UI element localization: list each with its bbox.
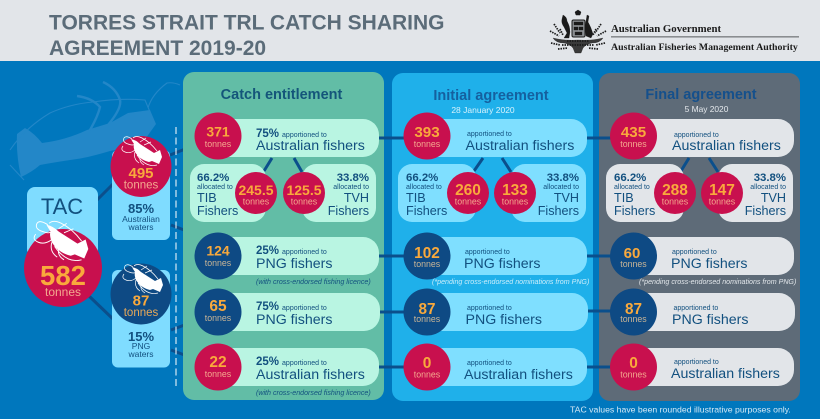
row: initial 102 PNG fishers: 102: [414, 245, 440, 262]
heading: [645, 87, 757, 114]
row: final 435 Australian fishers: [610, 112, 794, 160]
row: initial 102 PNG fishers: apportioned to: [465, 249, 510, 256]
row: final 435 Australian fishers: 435: [621, 124, 647, 141]
badge: 245.5 tonnes: [235, 172, 277, 214]
row: initial 393 Australian fishers: tonnes: [414, 139, 441, 149]
badge: 288 tonnes: 288: [662, 182, 688, 199]
sub-panel: catch TVH: [302, 164, 376, 222]
sub-panel: catch TIB: allocated to: [197, 184, 233, 191]
heading: Final agreement: [645, 87, 757, 103]
Australian waters share: 85%: [128, 201, 154, 216]
PNG waters share: [127, 329, 154, 359]
badge: 260 tonnes: 260: [455, 182, 481, 199]
row: final 60 PNG fishers: 60: [624, 245, 640, 262]
row: initial 87 PNG fishers: PNG fishers: [466, 312, 542, 328]
row: initial 102 PNG fishers: PNG fishers: [464, 256, 540, 272]
row: final 435 Australian fishers: apportioned to: [674, 132, 719, 139]
row: final 0 Australian fishers: [610, 344, 794, 390]
sub-panel: final TIB: allocated to: [614, 184, 650, 191]
badge: 495 tonnes: 495: [128, 165, 154, 182]
row: initial 393 Australian fishers: apportioned to: [467, 131, 512, 138]
icon: Australian coat of arms: [550, 10, 606, 53]
sub-panel: final TVH: allocated to: [750, 184, 786, 191]
connectors: TAC to waters: [89, 184, 113, 319]
row: catch 371 Australian fishers: tonnes: [205, 139, 232, 149]
panel: initial agreement: [392, 73, 593, 401]
row: catch 124 PNG fishers: (with cross-endorsed fishing licence): [256, 278, 371, 286]
row: final 87 PNG fishers: 87: [625, 301, 642, 318]
row: final 87 PNG fishers: [610, 288, 795, 336]
sub-panel: final TVH: 33.8%: [754, 172, 786, 184]
heading: Initial agreement: [433, 88, 549, 104]
sub-panel: catch TIB: 66.2%: [197, 172, 229, 184]
row: catch 124 PNG fishers: [194, 232, 379, 286]
panel: PNG waters: [112, 270, 170, 368]
PNG waters share: PNG: [132, 341, 150, 351]
badge: 87 tonnes: 87: [133, 292, 149, 310]
sub-panel: catch TIB: [190, 164, 266, 222]
PNG waters share: waters: [127, 349, 154, 359]
badge: 133 tonnes: 133: [502, 182, 528, 199]
row: final 0 Australian fishers: Australian fishers: [671, 366, 780, 382]
badge: 133 tonnes: [494, 172, 536, 214]
badge: 87 tonnes: [110, 264, 172, 324]
row: final 87 PNG fishers: tonnes: [620, 314, 647, 324]
sub-panel: initial TVH: 33.8%: [547, 172, 579, 184]
heading: Catch entitlement: [221, 87, 342, 103]
sub-panel: final TIB: TIB: [614, 191, 634, 205]
row: catch 371 Australian fishers: Australian fishers: [256, 138, 365, 154]
logo text: Australian Government / AFMA: Australian Fisheries Management Authority: [611, 42, 798, 53]
badge: 147 tonnes: 147: [709, 182, 735, 199]
badge: 125.5 tonnes: 125.5: [286, 182, 322, 198]
row: final 435 Australian fishers: Australian fishers: [672, 138, 781, 154]
sub-panel: catch TIB: TIB: [197, 191, 217, 205]
row: initial 0 Australian fishers: [404, 344, 587, 390]
badge: 245.5 tonnes: tonnes: [243, 196, 270, 206]
sub-panel: initial TVH: Fishers: [538, 204, 579, 218]
dashed divider: [175, 127, 177, 388]
footnote: TAC values have been rounded illustrative purposes only.: [570, 404, 791, 414]
heading: [433, 88, 549, 115]
icon: lobster: [34, 221, 88, 261]
row: catch 22 Australian fishers: 22: [209, 354, 227, 371]
sub-panel: catch TVH: allocated to: [333, 184, 369, 191]
badge: 147 tonnes: tonnes: [709, 196, 736, 206]
sub-panel: final TVH: TVH: [761, 191, 786, 205]
row: final 0 Australian fishers: apportioned to: [674, 359, 719, 366]
sub-panel: catch TIB: Fishers: [197, 204, 238, 218]
row: catch 65 PNG fishers: PNG fishers: [256, 312, 332, 328]
sub-panel: catch TVH: TVH: [344, 191, 369, 205]
row: initial 393 Australian fishers: Australian fishers: [466, 138, 574, 154]
sub-panel: final TVH: Fishers: [745, 204, 786, 218]
Australian waters share: Australian: [122, 214, 160, 224]
sub-panel: initial TIB: Fishers: [406, 204, 447, 218]
panel: final agreement: [599, 73, 800, 401]
connectors: between panels: [264, 138, 718, 367]
sub-panel: initial TIB: [398, 164, 476, 222]
row: initial 393 Australian fishers: [404, 112, 587, 160]
row: initial 102 PNG fishers: (*pending cross-endorsed nominations from PNG): [432, 278, 589, 286]
badge: 125.5 tonnes: [283, 172, 325, 214]
icon: lobster: [123, 264, 163, 294]
row: catch 65 PNG fishers: tonnes: [205, 313, 232, 323]
sub-panel: final TIB: [606, 164, 684, 222]
badge: 582 tonnes: tonnes: [45, 285, 81, 299]
badge: 133 tonnes: tonnes: [502, 196, 529, 206]
logo text: Australian Government / AFMA: Australian Government: [611, 23, 721, 35]
badge: 582 tonnes: [24, 221, 102, 307]
badge: 288 tonnes: tonnes: [662, 196, 689, 206]
row: final 60 PNG fishers: tonnes: [620, 259, 647, 269]
sub-panel: final TVH: [718, 164, 793, 222]
header band: [0, 0, 820, 61]
row: catch 124 PNG fishers: 25% apportioned to: [256, 245, 327, 257]
row: final 60 PNG fishers: PNG fishers: [671, 256, 747, 272]
row: catch 371 Australian fishers: [194, 112, 379, 160]
icon: lobster: [122, 136, 162, 166]
badge: 260 tonnes: tonnes: [455, 196, 482, 206]
row: catch 371 Australian fishers: 75% apportioned to: [256, 128, 327, 140]
badge: 495 tonnes: tonnes: [124, 180, 159, 192]
badge: 582 tonnes: 582: [40, 260, 86, 291]
badge: 147 tonnes: [701, 172, 743, 214]
sub-panel: initial TIB: 66.2%: [406, 172, 438, 184]
row: initial 87 PNG fishers: [404, 288, 588, 336]
Australian waters share: [122, 201, 160, 232]
logo text: Australian Government / AFMA: [611, 23, 799, 53]
badge: 288 tonnes: [654, 172, 696, 214]
row: catch 22 Australian fishers: [194, 344, 379, 397]
row: initial 0 Australian fishers: Australian fishers: [464, 367, 573, 383]
badge: 125.5 tonnes: tonnes: [291, 196, 318, 206]
row: catch 22 Australian fishers: tonnes: [205, 369, 232, 379]
TAC label: TAC: [41, 194, 83, 219]
row: initial 0 Australian fishers: 0: [423, 355, 431, 372]
sub-panel: initial TVH: TVH: [554, 191, 579, 205]
sub-panel: catch TVH: Fishers: [328, 204, 369, 218]
row: catch 65 PNG fishers: 65: [209, 298, 227, 315]
row: final 435 Australian fishers: tonnes: [620, 139, 647, 149]
row: final 87 PNG fishers: apportioned to: [674, 305, 718, 312]
sub-panel: initial TVH: allocated to: [543, 184, 579, 191]
row: final 0 Australian fishers: tonnes: [620, 370, 647, 380]
row: catch 371 Australian fishers: 371: [206, 124, 230, 140]
row: initial 393 Australian fishers: 393: [414, 124, 440, 141]
row: initial 87 PNG fishers: tonnes: [414, 314, 441, 324]
row: catch 22 Australian fishers: 25% apportioned to: [256, 356, 327, 368]
badge: 495 tonnes: [110, 136, 172, 197]
row: final 0 Australian fishers: 0: [629, 355, 638, 372]
row: final 87 PNG fishers: PNG fishers: [672, 312, 748, 328]
row: initial 0 Australian fishers: tonnes: [414, 370, 441, 380]
sub-panel: initial TIB: allocated to: [406, 184, 442, 191]
Australian waters share: waters: [127, 222, 154, 232]
row: initial 87 PNG fishers: apportioned to: [467, 305, 512, 312]
badge: 245.5 tonnes: 245.5: [238, 182, 274, 198]
row: final 60 PNG fishers: apportioned to: [672, 249, 717, 256]
sub-panel: final TIB: Fishers: [614, 204, 655, 218]
row: catch 124 PNG fishers: 124: [206, 242, 230, 258]
sub-panel: initial TVH: [511, 164, 586, 222]
heading: 5 May 2020: [685, 104, 729, 114]
badge: 87 tonnes: tonnes: [124, 307, 159, 319]
row: initial 102 PNG fishers: tonnes: [414, 259, 441, 269]
row: catch 22 Australian fishers: Australian fishers: [256, 367, 365, 383]
panel: TAC: [27, 187, 98, 257]
PNG waters share: 15%: [128, 329, 154, 344]
title: AGREEMENT 2019-20: [49, 37, 266, 60]
badge: 260 tonnes: [447, 172, 489, 214]
sub-panel: catch TVH: 33.8%: [337, 172, 369, 184]
row: initial 0 Australian fishers: apportioned to: [467, 360, 512, 367]
sub-panel: final TIB: 66.2%: [614, 172, 646, 184]
row: final 60 PNG fishers: [610, 232, 796, 286]
row: catch 124 PNG fishers: tonnes: [205, 258, 232, 268]
row: catch 124 PNG fishers: PNG fishers: [256, 256, 332, 272]
connectors: waters to catch entitlement: [170, 144, 205, 360]
row: initial 87 PNG fishers: 87: [418, 301, 436, 318]
row: catch 65 PNG fishers: [194, 288, 380, 336]
sub-panel: initial TIB: TIB: [406, 191, 426, 205]
row: catch 22 Australian fishers: (with cross-endorsed fishing licence): [256, 389, 371, 397]
heading: 28 January 2020: [451, 105, 515, 115]
row: final 60 PNG fishers: (*pending cross-endorsed nominations from PNG): [639, 278, 796, 286]
panel: catch entitlement: [183, 72, 384, 400]
icon: background lobster watermark: [10, 82, 180, 180]
row: catch 65 PNG fishers: 75% apportioned to: [256, 301, 327, 313]
panel: Australian waters: [112, 150, 170, 240]
row: initial 102 PNG fishers: [404, 232, 589, 286]
title: TORRES STRAIT TRL CATCH SHARING: [49, 12, 445, 34]
